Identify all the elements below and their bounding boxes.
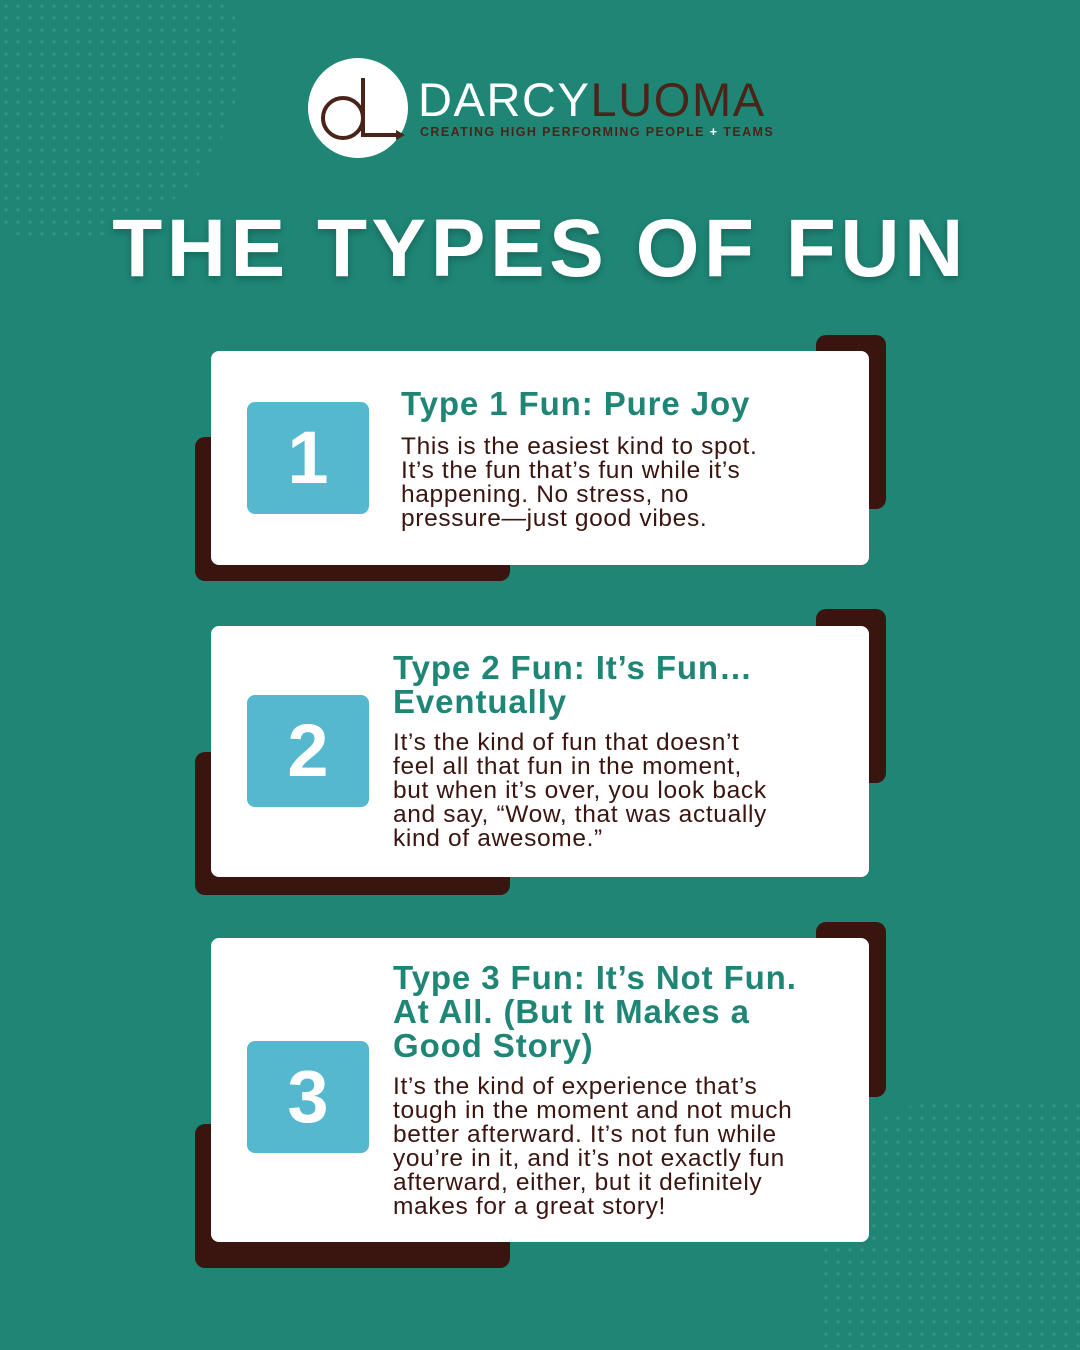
number badge 1 bbox=[247, 402, 369, 514]
logo wordmark: DARCYLUOMA bbox=[418, 73, 766, 126]
number badge 2 bbox=[247, 695, 369, 807]
panel 3 bbox=[195, 922, 886, 1268]
heading 1: Type 1 Fun: Pure Joy bbox=[401, 385, 750, 422]
body 3: tough in the moment and not much bbox=[393, 1097, 792, 1124]
body 1 bbox=[401, 433, 757, 532]
body 3: you’re in it, and it’s not exactly fun bbox=[393, 1145, 785, 1172]
number badge 2: 2 bbox=[287, 709, 329, 792]
title: THE TYPES OF FUN bbox=[112, 203, 968, 294]
heading 2: Eventually bbox=[393, 683, 567, 720]
tagline: CREATING HIGH PERFORMING PEOPLE + TEAMS bbox=[420, 125, 774, 139]
number badge 3 bbox=[247, 1041, 369, 1153]
body 3: It’s the kind of experience that’s bbox=[393, 1073, 757, 1100]
heading 2: Type 2 Fun: It’s Fun… bbox=[393, 649, 753, 686]
logo circle icon bbox=[308, 58, 408, 158]
body 1: pressure—just good vibes. bbox=[401, 505, 707, 532]
panel 2 bbox=[195, 609, 886, 895]
body 3: makes for a great story! bbox=[393, 1193, 666, 1220]
body 3 bbox=[393, 1073, 792, 1220]
number badge 3: 3 bbox=[287, 1055, 329, 1138]
body 1: This is the easiest kind to spot. bbox=[401, 433, 757, 460]
body 2: feel all that fun in the moment, bbox=[393, 753, 742, 780]
body 3: afterward, either, but it definitely bbox=[393, 1169, 762, 1196]
body 1: It’s the fun that’s fun while it’s bbox=[401, 457, 740, 484]
heading 2 bbox=[393, 649, 753, 720]
decorative dots bottom-right bbox=[820, 1100, 1080, 1350]
body 2: but when it’s over, you look back bbox=[393, 777, 767, 804]
body 2: and say, “Wow, that was actually bbox=[393, 801, 767, 828]
heading 3: At All. (But It Makes a bbox=[393, 993, 750, 1030]
panel 1 bbox=[195, 335, 886, 581]
decorative dots top-left bbox=[0, 0, 240, 240]
heading 3: Type 3 Fun: It’s Not Fun. bbox=[393, 959, 797, 996]
body 3: better afterward. It’s not fun while bbox=[393, 1121, 777, 1148]
body 2 bbox=[393, 729, 767, 852]
heading 3 bbox=[393, 959, 797, 1064]
heading 3: Good Story) bbox=[393, 1027, 594, 1064]
logo bbox=[308, 58, 774, 158]
body 2: It’s the kind of fun that doesn’t bbox=[393, 729, 740, 756]
body 1: happening. No stress, no bbox=[401, 481, 689, 508]
body 2: kind of awesome.” bbox=[393, 825, 603, 852]
number badge 1: 1 bbox=[287, 416, 329, 499]
